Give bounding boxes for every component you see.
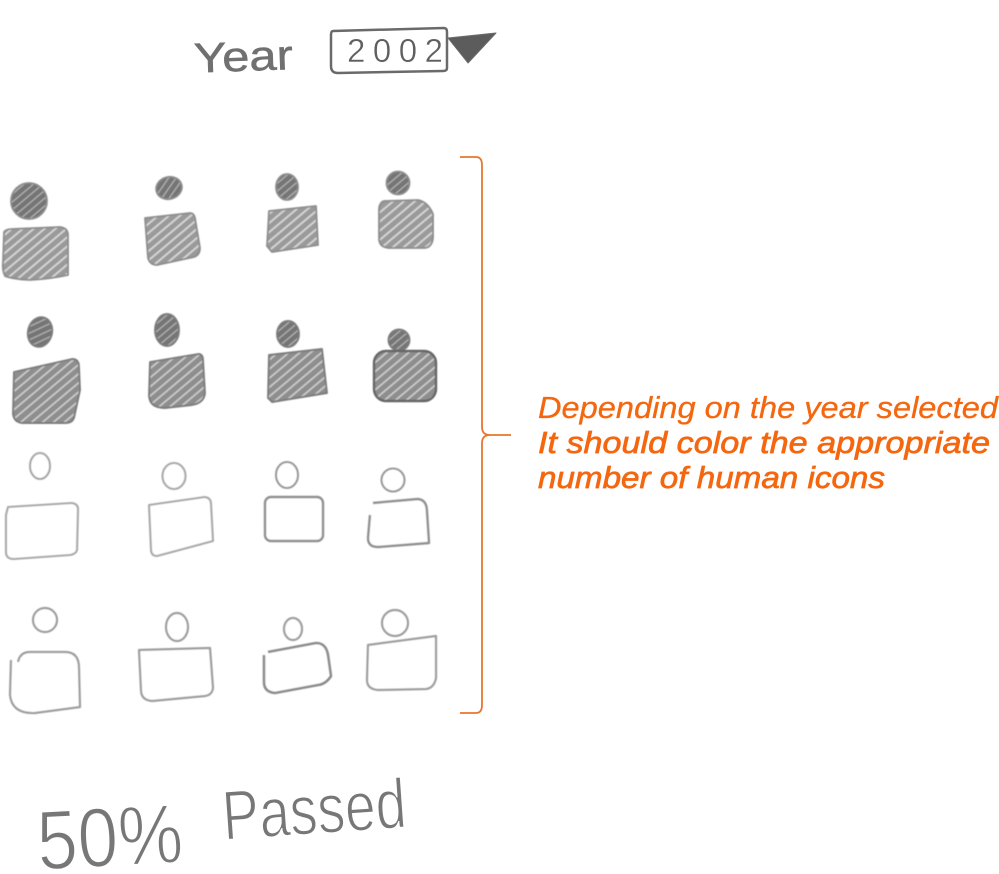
year dropdown: 2002 xyxy=(347,32,443,69)
annotation text xyxy=(538,390,999,495)
year dropdown xyxy=(331,28,496,73)
orange bracket xyxy=(460,157,511,713)
year label: Year xyxy=(193,31,294,82)
human icon grid xyxy=(3,172,436,713)
pass rate caption xyxy=(34,764,409,874)
row 2 filled icons xyxy=(13,314,436,423)
pass rate caption: Passed xyxy=(220,764,409,855)
row 4 empty icons xyxy=(10,608,436,713)
annotation text: number of human icons xyxy=(538,460,885,495)
annotation text: It should color the appropriate xyxy=(538,425,990,460)
row 3 empty icons xyxy=(6,453,429,559)
row 1 filled icons xyxy=(3,172,433,280)
annotation text: Depending on the year selected xyxy=(538,390,999,425)
